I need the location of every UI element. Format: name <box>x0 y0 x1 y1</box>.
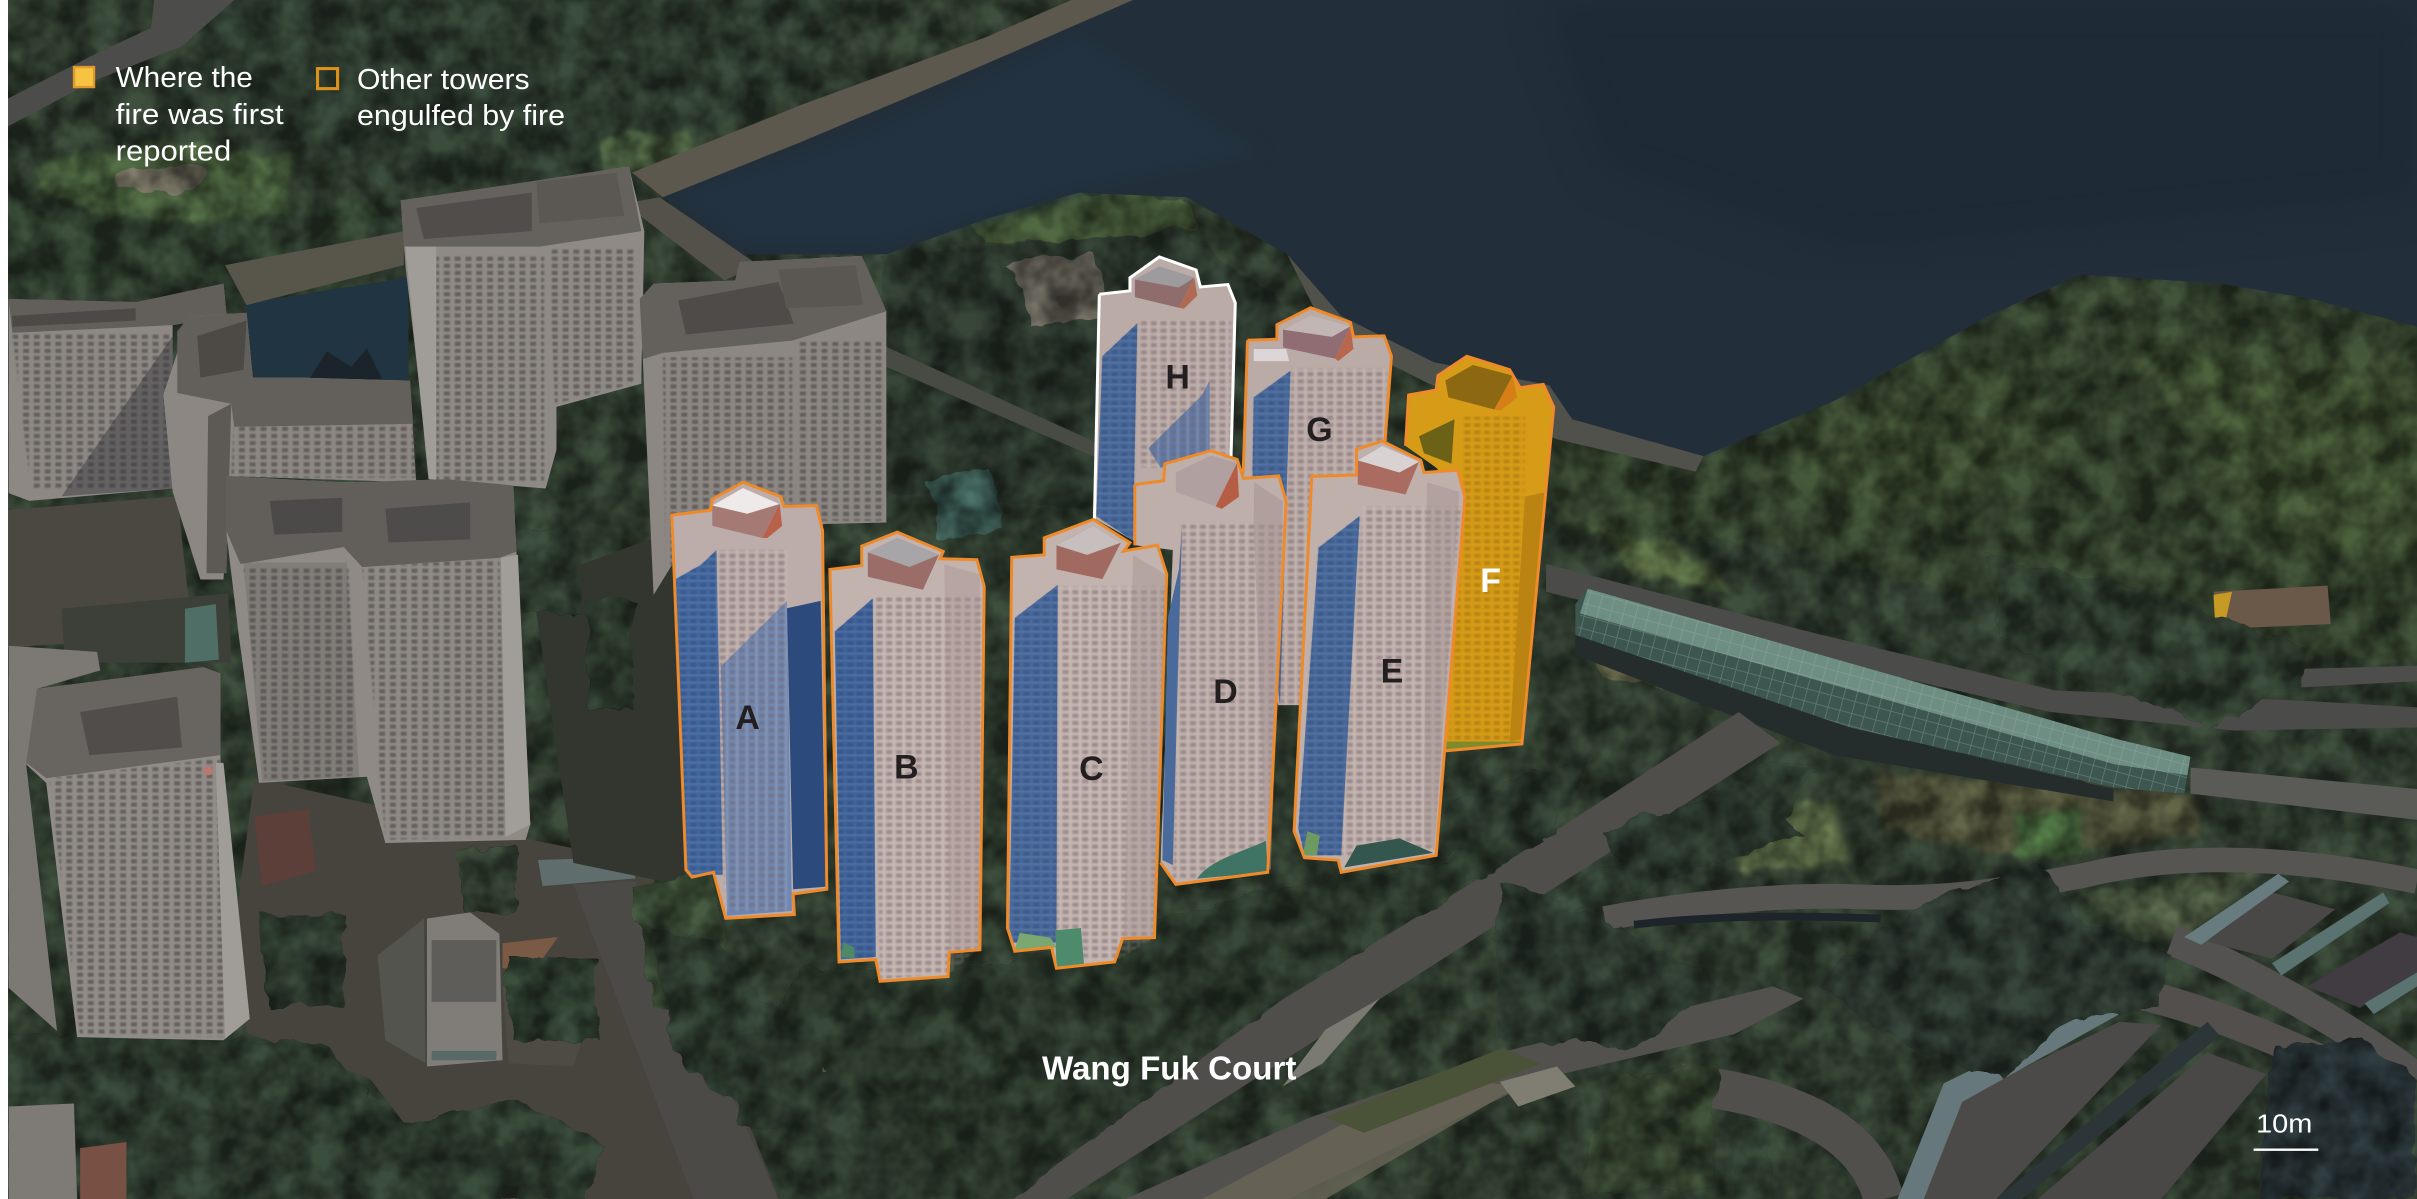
courtyard <box>8 496 193 647</box>
red house <box>2214 586 2331 629</box>
tower D <box>1135 451 1286 884</box>
water <box>663 0 2417 456</box>
small inlet <box>245 277 408 385</box>
tower G <box>1243 308 1391 705</box>
tower: centre twin <box>227 476 530 843</box>
road east: rail <box>1546 564 2417 730</box>
shoreline <box>632 0 1133 197</box>
podium block <box>427 912 503 1066</box>
scale bar: 10m <box>2256 1109 2312 1139</box>
tower F (fire origin, yellow) <box>1406 356 1554 751</box>
legend text: fire origin: fire was first <box>116 99 284 131</box>
swatch: yellow <box>74 67 94 87</box>
legend text: other towers: engulfed by fire <box>357 100 565 132</box>
scale bar <box>2254 1109 2318 1150</box>
legend text: other towers: Other towers <box>357 64 530 96</box>
red roof block <box>80 1142 126 1199</box>
top left road <box>8 0 234 126</box>
surrounding residential towers <box>9 166 886 1199</box>
lower left plaza <box>231 778 778 1199</box>
grass lower east <box>1874 771 2204 855</box>
legend text: fire origin: reported <box>116 135 231 167</box>
label E: E <box>1381 653 1403 691</box>
location label: Wang Fuk Court <box>1042 1051 1296 1088</box>
label B: B <box>894 748 919 786</box>
legend: other towers <box>318 64 565 132</box>
orange plaza details <box>503 937 558 974</box>
peninsula clearings <box>968 193 1195 243</box>
tower: west edge <box>9 646 100 1031</box>
legend text: fire origin: Where the <box>116 62 253 94</box>
label H: H <box>1165 358 1190 396</box>
tower E <box>1294 441 1465 872</box>
loop road <box>1680 1083 1884 1199</box>
tower C <box>1007 520 1167 968</box>
shaded road <box>532 532 686 886</box>
park <box>40 142 293 225</box>
rail bridge <box>624 197 758 280</box>
ramp road <box>2061 983 2400 1097</box>
swatch: outline <box>318 69 338 89</box>
tower H (white outline) <box>1094 257 1235 540</box>
label A: A <box>735 699 760 737</box>
curved road <box>1605 860 2417 919</box>
label G: G <box>1306 411 1333 449</box>
bottom right highways <box>1921 1022 2161 1199</box>
label C: C <box>1079 750 1104 788</box>
tower B <box>830 532 984 981</box>
tower: north east <box>640 256 886 595</box>
southern roads <box>1125 986 1804 1199</box>
teal elevated walkway <box>1575 589 2190 794</box>
diagonal road <box>1010 712 1780 1199</box>
label D: D <box>1213 673 1238 711</box>
tower: northwest mid <box>163 313 416 579</box>
tower: north tall <box>401 166 644 489</box>
left white margin <box>0 0 8 1199</box>
low block bottom left <box>9 1103 77 1199</box>
peninsula road <box>886 347 1133 472</box>
tower: west front <box>26 667 250 1040</box>
shadow under walkway <box>1575 635 2113 801</box>
road east: elevated continuation <box>2190 767 2417 820</box>
tower A <box>672 482 827 918</box>
label F: F <box>1480 562 1501 600</box>
tower: west rear <box>9 284 227 501</box>
legend: fire origin <box>74 62 284 167</box>
tree clumps over roads <box>8 529 2417 1199</box>
